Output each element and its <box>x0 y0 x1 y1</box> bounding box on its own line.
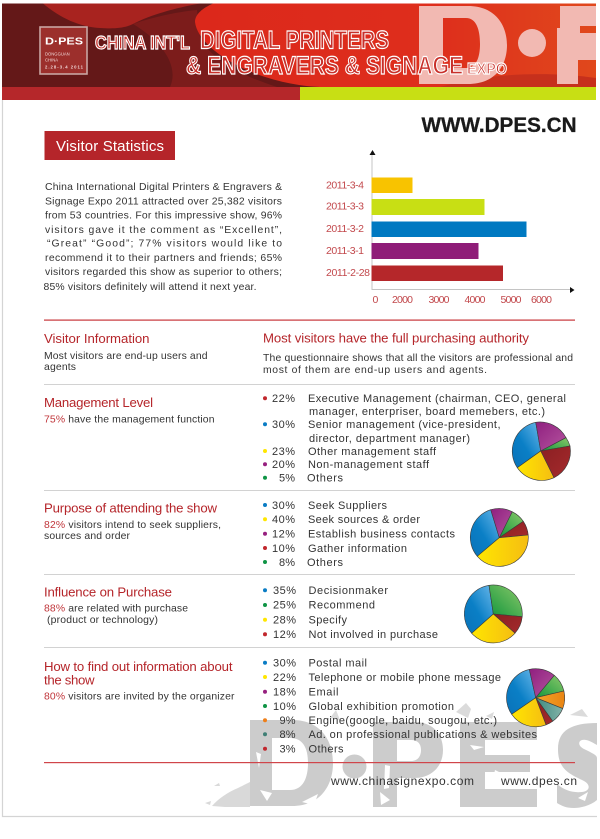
heading line 2: the show <box>44 672 95 688</box>
heading: Influence on Purchase <box>44 584 172 600</box>
pie chart <box>512 422 570 480</box>
list: 30% <box>273 658 296 670</box>
heading: Visitor Information <box>44 331 150 346</box>
list: 12% <box>272 528 295 540</box>
x axis labels: 4000 <box>464 294 486 306</box>
bar labels: 2011-3-3 <box>326 200 364 212</box>
intro paragraph: “Great” “Good”; 77% visitors would like to <box>47 238 282 250</box>
list: Establish business contacts <box>308 528 456 540</box>
text block <box>44 520 221 542</box>
section button: Visitor Statistics <box>44 131 175 160</box>
list: 23% <box>272 446 295 458</box>
x axis labels <box>372 294 552 306</box>
banner logo: D·PES <box>45 36 83 48</box>
panel: influence on purchase <box>44 584 522 643</box>
list <box>263 585 438 641</box>
x axis labels: 5000 <box>500 294 522 306</box>
panel: how to find out information <box>44 658 565 756</box>
list: Email <box>308 686 338 698</box>
list: Seek Suppliers <box>308 500 388 512</box>
text block: (product or technology) <box>47 615 158 626</box>
x axis labels: 3000 <box>428 294 450 306</box>
heading: authority: Most visitors have the full purchasing authority <box>263 330 529 346</box>
text block: 82% visitors intend to seek suppliers, <box>44 520 221 531</box>
banner logo <box>40 27 87 74</box>
divider red <box>44 320 575 321</box>
intro paragraph <box>44 182 282 293</box>
footer websites: www.chinasignexpo.com <box>330 774 474 788</box>
bar labels <box>326 180 370 279</box>
list: 30% <box>272 419 295 431</box>
list: Specify <box>308 614 348 626</box>
list: Other management staff <box>308 446 437 458</box>
bar labels: 2011-3-2 <box>326 223 364 235</box>
banner logo: DONGGUAN <box>45 52 70 56</box>
pie chart <box>506 669 565 727</box>
text block: agents <box>44 362 76 373</box>
text block: questionnaire: The questionnaire shows that all the visitors are professional and <box>263 353 573 364</box>
list: Global exhibition promotion <box>308 701 454 713</box>
list: 28% <box>273 614 296 626</box>
list: 9% <box>280 715 296 727</box>
list: Seek sources & order <box>308 514 420 526</box>
list: 30% <box>272 500 295 512</box>
panel: management level <box>44 393 570 484</box>
banner title: DIGITAL PRINTERS <box>200 26 389 54</box>
banner title: EXPO <box>467 61 507 78</box>
list: 5% <box>279 472 295 484</box>
list: 8% <box>279 557 295 569</box>
banner title: CHINA INT'L <box>95 33 190 53</box>
text block: 80% visitors are invited by the organizer <box>44 692 235 702</box>
list <box>263 500 456 569</box>
list <box>263 658 538 756</box>
list: Postal mail <box>308 658 367 670</box>
panel: visitor information <box>44 330 573 376</box>
list: 8% <box>280 729 296 741</box>
list: 18% <box>273 686 296 698</box>
heading: Purpose of attending the show <box>44 500 217 516</box>
list: 25% <box>273 600 296 612</box>
list: Gather information <box>308 543 407 555</box>
list: Others <box>307 472 344 484</box>
list: Executive Management (chairman, CEO, general <box>308 393 566 405</box>
text block: questionnaire: most of them are end-up users and agents. <box>263 365 487 376</box>
x axis labels: 0 <box>372 294 378 306</box>
list <box>263 393 566 484</box>
banner big letters: D.P <box>419 6 596 84</box>
intro paragraph: Signage Expo 2011 attracted over 25,382 visitors <box>45 196 282 208</box>
text block: sources and order <box>44 531 131 542</box>
list: 22% <box>272 393 295 405</box>
list: 3% <box>280 744 296 756</box>
bar labels: 2011-3-1 <box>326 245 364 257</box>
list: Others <box>307 557 344 569</box>
banner title <box>95 30 507 75</box>
intro paragraph: China International Digital Printers & Engravers & <box>45 182 282 193</box>
list: 10% <box>272 543 295 555</box>
list: 20% <box>272 459 295 471</box>
text block <box>44 351 208 373</box>
section button: Visitor Statistics: Visitor Statistics <box>56 138 164 155</box>
banner logo: 2.28-3.4 2011 <box>45 64 84 70</box>
intro paragraph: recommend it to their partners and friends; 65% <box>45 253 282 264</box>
x axis labels: 6000 <box>531 294 552 306</box>
text block: 75% have the management function <box>44 414 215 426</box>
bars <box>372 178 526 281</box>
watermark speckles <box>256 727 588 807</box>
text block <box>44 604 188 626</box>
list: manager, enterpriser, board memebers, etc.) <box>309 406 545 418</box>
intro paragraph: from 53 countries. For this impressive show, 96% <box>45 210 282 222</box>
pie chart <box>470 509 528 566</box>
list: Ad. on professional publications & websites <box>308 729 538 741</box>
list: Recommend <box>308 600 375 612</box>
banner strip <box>2 87 596 100</box>
text block: 88% are related with purchase <box>44 604 188 615</box>
list: Not involved in purchase <box>308 629 438 641</box>
x axis labels: 2000 <box>392 294 413 306</box>
text block: questionnaire <box>263 353 573 376</box>
list: Senior management (vice-president, <box>308 419 500 431</box>
list: Others <box>308 744 344 756</box>
list: Telephone or mobile phone message <box>308 672 501 684</box>
footer websites <box>330 774 577 788</box>
bar labels: 2011-3-4 <box>326 180 364 192</box>
list: 12% <box>273 629 296 641</box>
website url heading: WWW.DPES.CN <box>422 114 576 137</box>
banner logo: CHINA <box>45 58 58 62</box>
list: 10% <box>273 701 296 713</box>
intro paragraph: visitors regarded this show as superior to others; <box>45 267 282 278</box>
intro paragraph: 85% visitors definitely will attend it next year. <box>44 282 256 293</box>
text block: Most visitors are end-up users and <box>44 351 208 362</box>
list: 40% <box>272 514 295 526</box>
list: Engine(google, baidu, sougou, etc.) <box>308 715 497 727</box>
list: 22% <box>273 672 296 684</box>
heading: Management Level <box>44 395 153 410</box>
list: director, department manager) <box>309 433 470 445</box>
intro paragraph: visitors gave it the comment as “Excellent”, <box>45 225 282 236</box>
list: Non-management staff <box>308 459 430 471</box>
list: Decisionmaker <box>308 585 388 597</box>
list: 35% <box>273 585 296 597</box>
banner <box>2 4 596 88</box>
watermark: D.PES <box>205 703 597 808</box>
heading: How to find out information about <box>44 659 233 674</box>
pie chart <box>464 585 522 643</box>
bar labels: 2011-2-28 <box>326 267 370 279</box>
chart axes <box>370 150 574 293</box>
banner title: & ENGRAVERS & SIGNAGE <box>186 52 463 80</box>
footer websites: www.dpes.cn <box>500 774 577 788</box>
bar chart <box>326 150 574 306</box>
panel: purpose of attending <box>44 500 528 569</box>
